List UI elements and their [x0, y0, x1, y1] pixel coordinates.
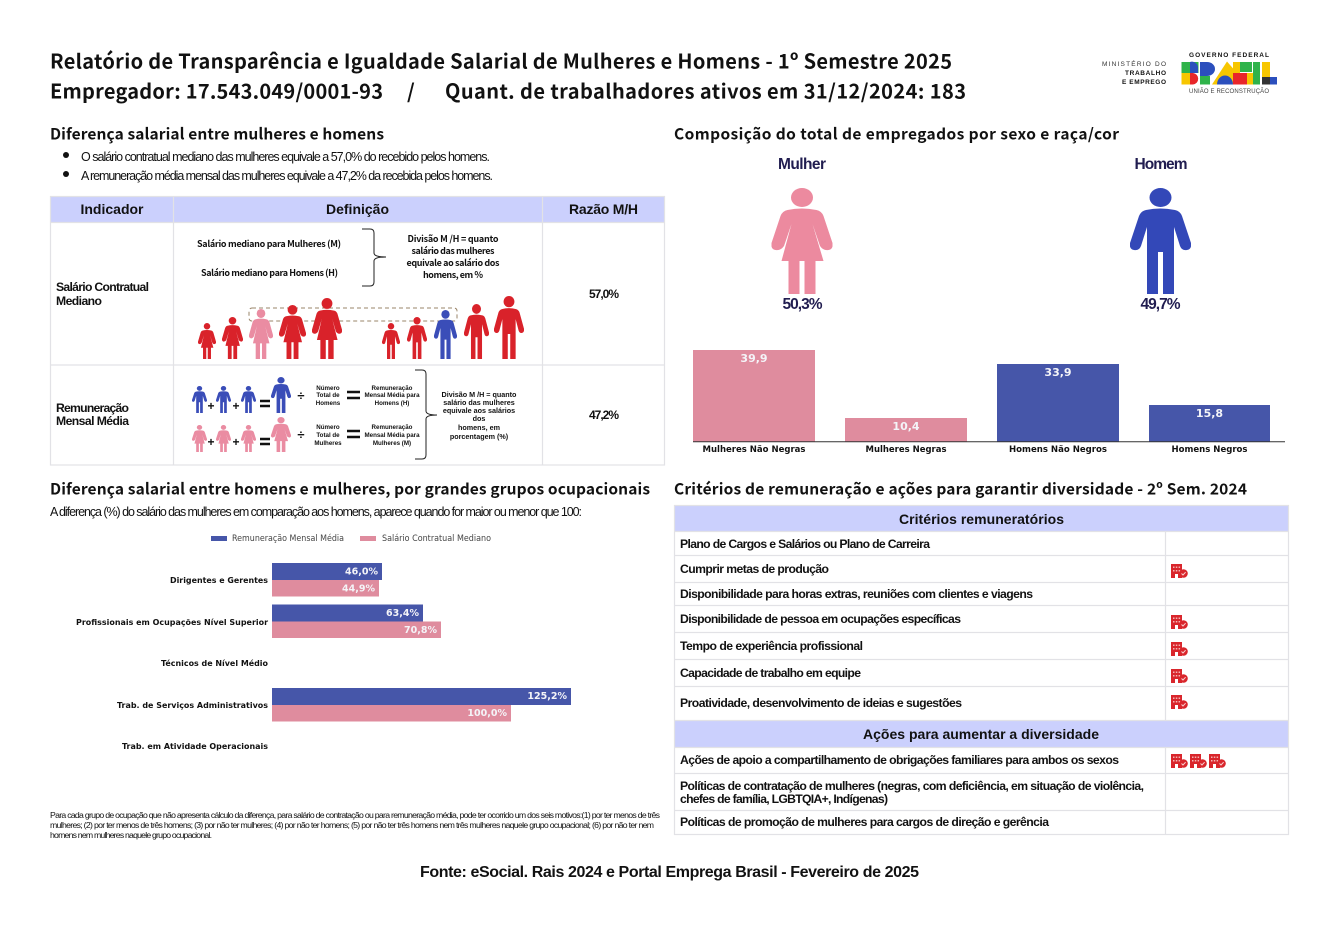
row: remuneração mensal média: Remuneração	[56, 401, 129, 415]
table: critérios remuneratórios: Plano de Cargos e Salários ou Plano de Carreira	[680, 537, 930, 551]
bar chart: grupos ocupacionais: Trab. de Serviços Administrativos	[117, 701, 268, 710]
pictogram: mulher: Mulher	[778, 156, 826, 173]
table: critérios remuneratórios: Disponibilidade de pessoa em ocupações específicas	[680, 612, 961, 626]
heading: composição: Composição do total de empregados por sexo e raça/cor	[674, 122, 1119, 144]
row: salário contratual mediano: Salário mediano para Mulheres (M)	[197, 237, 341, 250]
bar chart: grupos ocupacionais: Dirigentes e Gerentes	[170, 576, 268, 585]
bar chart: grupos ocupacionais: 63,4%	[386, 608, 419, 619]
row: remuneração mensal média: Mulheres (M)	[373, 440, 411, 447]
row: remuneração mensal média: Mulheres	[314, 440, 342, 447]
pictogram: homem: 49,7%	[1140, 296, 1181, 313]
logo: ministério e governo federal: GOVERNO FEDERAL	[1189, 52, 1269, 59]
bar chart: sexo e raça: Homens Negros	[1172, 445, 1248, 455]
bar chart: grupos ocupacionais: 44,9%	[342, 584, 375, 594]
row: salário contratual mediano: homens, em %	[423, 268, 483, 281]
row: remuneração mensal média: 47,2%	[589, 408, 619, 422]
heading: critérios e ações: Critérios de remuneração e ações para garantir diversidade - 2º Sem. 2024	[674, 478, 1247, 500]
legend: Remuneração Mensal Média	[232, 533, 344, 544]
icons: soma de mulheres: +	[207, 435, 215, 449]
table: critérios remuneratórios: chefes de família, LGBTQIA+, Indígenas)	[680, 792, 888, 806]
bar chart: grupos ocupacionais: 100,0%	[467, 708, 507, 719]
bar chart: sexo e raça: 39,9	[740, 352, 768, 365]
row: remuneração mensal média: Mensal Média	[56, 414, 129, 428]
row: salário contratual mediano: Divisão M /H = quanto	[408, 232, 499, 245]
footnote: mulheres; (2) por ter menos de três homens; (3) por não ter mulheres; (4) por não ter homens; (5) por não ter três homens nem três mulheres naquele grupo ocupacional; (6) por não ter nem	[50, 820, 654, 830]
icons: soma de mulheres: ÷	[297, 427, 305, 442]
logo: ministério e governo federal: TRABALHO	[1125, 70, 1166, 77]
row: remuneração mensal média: Total de	[316, 432, 340, 439]
title	[50, 46, 966, 104]
bar chart: grupos ocupacionais: 125,2%	[527, 691, 567, 702]
table: indicadores: Definição	[326, 201, 389, 217]
icons: soma de mulheres	[192, 417, 360, 452]
pictogram: mulher	[771, 156, 833, 313]
bullet list: O salário contratual mediano das mulheres equivale a 57,0% do recebido pelos homens.	[81, 150, 490, 164]
table: critérios remuneratórios: Ações para aumentar a diversidade	[863, 726, 1099, 742]
icons: soma de homens: +	[207, 399, 215, 413]
row: remuneração mensal média: Homens	[316, 400, 341, 407]
row: remuneração mensal média: dos	[473, 414, 485, 423]
bar chart: sexo e raça: 33,9	[1044, 366, 1072, 379]
panel: composição	[674, 122, 1285, 455]
table: critérios remuneratórios: Políticas de contratação de mulheres (negras, com deficiência, em situação de violência,	[680, 779, 1144, 793]
table: indicadores: Indicador	[80, 201, 144, 217]
table: critérios remuneratórios	[674, 506, 1288, 834]
row: remuneração mensal média: Mensal Média para	[364, 392, 420, 399]
icons: soma de homens: ÷	[297, 388, 305, 403]
row: remuneração mensal média: Total de	[316, 392, 340, 399]
panel: critérios e ações	[674, 478, 1288, 834]
row: remuneração mensal média: salário das mulheres	[443, 398, 515, 407]
logo: ministério e governo federal	[1102, 52, 1277, 95]
row: remuneração mensal média: porcentagem (%)	[450, 432, 509, 441]
bar chart: sexo e raça	[693, 350, 1285, 455]
icons: critérios adotados	[1171, 564, 1188, 709]
icons: soma de mulheres: +	[232, 435, 240, 449]
row: remuneração mensal média: Número	[316, 424, 340, 431]
bar chart: grupos ocupacionais: 70,8%	[404, 625, 437, 636]
bar chart: sexo e raça: Mulheres Negras	[866, 445, 946, 455]
heading: diferença salarial: Diferença salarial entre mulheres e homens	[50, 122, 384, 144]
row: remuneração mensal média: homens, em	[458, 423, 500, 432]
row: salário contratual mediano: Salário mediano para Homens (H)	[201, 266, 338, 279]
row: salário contratual mediano: Mediano	[56, 294, 102, 308]
bar chart: grupos ocupacionais: Profissionais em Ocupações Nível Superior	[76, 618, 268, 627]
footnote	[50, 810, 661, 840]
row: salário contratual mediano: equivale ao salário dos	[406, 256, 500, 269]
table: critérios remuneratórios: Cumprir metas de produção	[680, 562, 829, 576]
row: remuneração mensal média: Remuneração	[372, 385, 413, 392]
footnote: homens nem mulheres naquele grupo ocupacional.	[50, 830, 212, 840]
bar chart: grupos ocupacionais	[76, 563, 571, 751]
row: remuneração mensal média: Número	[316, 385, 340, 392]
table: critérios remuneratórios: Capacidade de trabalho em equipe	[680, 666, 861, 680]
table: critérios remuneratórios: Critérios remuneratórios	[899, 511, 1064, 527]
bar chart: sexo e raça: Homens Não Negros	[1009, 445, 1107, 455]
table: critérios remuneratórios: Ações de apoio a compartilhamento de obrigações familiares para ambos os sexos	[680, 753, 1119, 767]
table: critérios remuneratórios: Tempo de experiência profissional	[680, 639, 863, 653]
pictogram: homem	[1130, 156, 1191, 313]
logo: ministério e governo federal: UNIÃO E RECONSTRUÇÃO	[1189, 88, 1269, 95]
bullet list	[63, 150, 493, 183]
table: indicadores	[50, 196, 664, 465]
row: salário contratual mediano: Salário Contratual	[56, 280, 149, 294]
row: remuneração mensal média: Divisão M /H = quanto	[442, 390, 517, 399]
bar chart: grupos ocupacionais: Técnicos de Nível Médio	[161, 658, 268, 668]
table: critérios remuneratórios: Políticas de promoção de mulheres para cargos de direção e gerência	[680, 815, 1049, 829]
icons: soma de homens: +	[232, 399, 240, 413]
row: remuneração mensal média: Remuneração	[372, 424, 413, 431]
logo: ministério e governo federal: E EMPREGO	[1122, 79, 1166, 86]
pictogram: homem: Homem	[1134, 156, 1188, 173]
panel: diferença salarial	[50, 122, 664, 465]
bar chart: sexo e raça: 15,8	[1196, 407, 1223, 420]
icons: soma de homens	[192, 377, 360, 413]
bar chart: grupos ocupacionais: 46,0%	[345, 566, 378, 578]
legend: Salário Contratual Mediano	[382, 534, 491, 544]
row: salário contratual mediano: salário das mulheres	[412, 244, 495, 257]
title: Quant. de trabalhadores ativos em 31/12/2024: 183	[445, 76, 966, 104]
pictogram: mulher: 50,3%	[782, 296, 823, 313]
logo: ministério e governo federal: MINISTÉRIO DO	[1102, 59, 1166, 68]
icons: ações adotadas	[1171, 754, 1226, 768]
row: remuneração mensal média: Homens (H)	[375, 400, 409, 407]
table: critérios remuneratórios: Proatividade, desenvolvimento de ideias e sugestões	[680, 696, 962, 710]
footnote: Para cada grupo de ocupação que não apresenta cálculo da diferença, para salário de contratação ou para remuneração média, pode ter ocorrido um dos seis motivos:(1) por ter menos de três	[50, 810, 661, 820]
title: Empregador: 17.543.049/0001-93	[50, 76, 383, 104]
icons: mulheres e homens ordenados	[198, 296, 524, 359]
table: indicadores: Razão M/H	[569, 201, 638, 217]
bullet list: A remuneração média mensal das mulheres equivale a 47,2% da recebida pelos homens.	[81, 169, 493, 183]
title: /	[407, 76, 415, 104]
bar chart: grupos ocupacionais: Trab. em Atividade Operacionais	[122, 742, 268, 751]
subtitle: A diferença (%) do salário das mulheres em comparação aos homens, aparece quando for maior ou menor que 100:	[50, 505, 582, 519]
bar chart: sexo e raça: Mulheres Não Negras	[702, 445, 806, 455]
bar chart: sexo e raça: 10,4	[892, 420, 920, 433]
row: remuneração mensal média	[56, 370, 619, 459]
legend	[211, 533, 491, 544]
row: salário contratual mediano	[56, 229, 619, 359]
row: salário contratual mediano: 57,0%	[589, 287, 619, 301]
source footer: Fonte: eSocial. Rais 2024 e Portal Emprega Brasil - Fevereiro de 2025	[420, 864, 919, 881]
heading: grupos ocupacionais: Diferença salarial entre homens e mulheres, por grandes grupos ocupacionais	[50, 478, 650, 500]
row: remuneração mensal média: Mensal Média para	[364, 432, 420, 439]
row: remuneração mensal média: equivale aos salários	[443, 406, 515, 415]
title: Relatório de Transparência e Igualdade Salarial de Mulheres e Homens - 1º Semestre 2025	[50, 46, 952, 74]
table: critérios remuneratórios: Disponibilidade para horas extras, reuniões com clientes e viagens	[680, 587, 1033, 601]
panel: grupos ocupacionais	[50, 478, 661, 840]
